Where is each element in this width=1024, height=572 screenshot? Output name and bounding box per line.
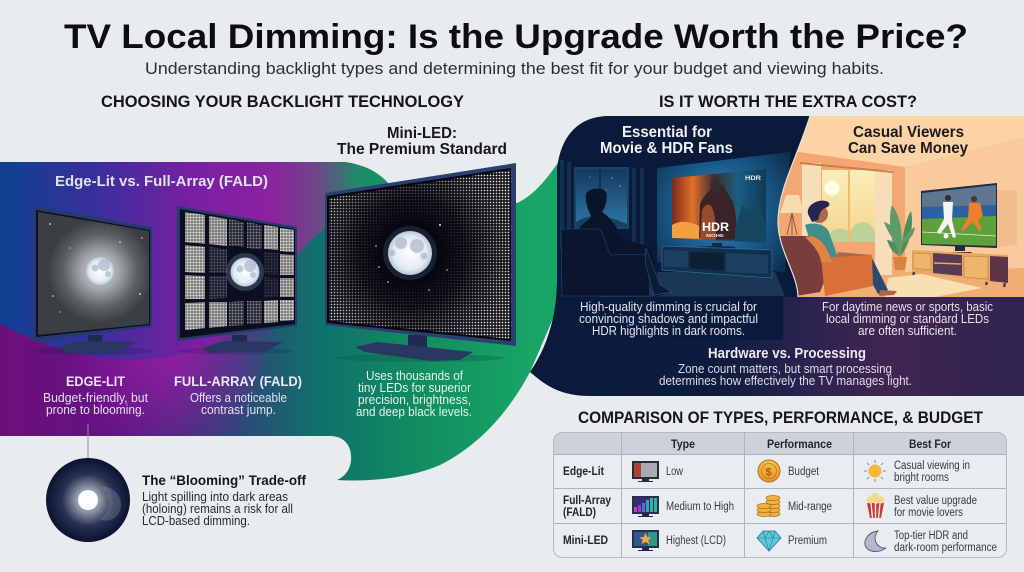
- floor lamp: [780, 195, 804, 235]
- text: high-quality dimming: convincing shadows and impactful: [579, 312, 758, 326]
- text: hardware vs processing: determines how effectively the TV manages light.: [659, 374, 912, 388]
- row: full-array: for movie lovers: [894, 507, 963, 519]
- heading: choosing your backlight technology: CHOOSING YOUR BACKLIGHT TECHNOLOGY: [101, 93, 464, 111]
- caption: mini-led: and deep black levels.: [356, 405, 472, 419]
- subtitle: Understanding backlight types and determining the best fit for your budget and viewing habits.: [145, 60, 884, 78]
- caption: edge-lit: [43, 374, 149, 417]
- text: casual viewers can save money: Can Save Money: [848, 140, 968, 157]
- icon: sun: [864, 460, 886, 482]
- heading: mini-led premium standard: The Premium Standard: [337, 141, 507, 158]
- scene: sunny living room: [770, 116, 1024, 297]
- row: full-array: Mid-range: [788, 501, 832, 513]
- text: hardware vs processing: Hardware vs. Processing: [708, 346, 866, 362]
- viewer in armchair: [775, 201, 897, 297]
- caption: mini-led: precision, brightness,: [358, 393, 471, 407]
- icon: coin stacks: [757, 496, 780, 516]
- heading: mini-led premium standard: Mini-LED:: [387, 125, 457, 142]
- icon: crescent moon: [865, 531, 886, 552]
- panel: is it worth the extra cost: [525, 116, 1024, 398]
- row: mini-led: [563, 530, 997, 554]
- text: blooming explanation: [142, 472, 306, 528]
- text: essential for movie and hdr fans: [600, 124, 733, 157]
- scene: dark home theater: [560, 152, 790, 297]
- comparison table: [554, 432, 1006, 558]
- text: essential for movie and hdr fans: Movie & HDR Fans: [600, 140, 733, 157]
- icon: full-array tv: [177, 206, 297, 354]
- text: high-quality dimming: HDR highlights in dark rooms.: [592, 324, 745, 338]
- text: hardware vs processing: Zone count matters, but smart processing: [678, 362, 892, 376]
- panel: backlight technology: [0, 158, 561, 480]
- table header: Type: [671, 439, 695, 451]
- row: full-array: (FALD): [563, 505, 596, 519]
- caption: mini-led: tiny LEDs for superior: [358, 381, 471, 395]
- text: blooming explanation: The “Blooming” Trade-off: [142, 472, 306, 488]
- caption: full-array: Offers a noticeable: [190, 391, 287, 405]
- table header: Performance: [767, 439, 832, 451]
- row: mini-led: Premium: [788, 535, 827, 547]
- tv with movie: HDR: [745, 176, 762, 182]
- row: edge-lit: Casual viewing in: [894, 460, 970, 472]
- caption: full-array: [174, 374, 302, 417]
- text: high-quality dimming: [579, 300, 758, 338]
- caption: mini-led: [356, 369, 472, 419]
- row: edge-lit: [563, 460, 970, 484]
- text: essential for movie and hdr fans: Essential for: [622, 124, 712, 141]
- icon: full-array monitor: [632, 496, 659, 517]
- caption: edge-lit: Budget-friendly, but: [43, 391, 149, 405]
- heading: mini-led premium standard: [337, 125, 507, 158]
- icon: dollar coin: $: [766, 466, 772, 478]
- text: daytime news or sports: For daytime news or sports, basic: [822, 300, 993, 314]
- text: hardware vs processing: [659, 346, 912, 388]
- text: casual viewers can save money: [848, 124, 968, 157]
- row: edge-lit: Budget: [788, 466, 820, 478]
- text: blooming explanation: Light spilling into dark areas: [142, 490, 288, 504]
- plant: [884, 205, 915, 270]
- row: mini-led: Highest (LCD): [666, 535, 726, 547]
- icon: mini-led tv: [325, 163, 516, 362]
- tv with movie: HDR: [702, 220, 729, 234]
- row: full-array: Medium to High: [666, 501, 734, 513]
- row: full-array: [563, 493, 977, 519]
- text: casual viewers can save money: Casual Viewers: [853, 124, 964, 141]
- text: daytime news or sports: [822, 300, 993, 338]
- icon: diamond: [757, 531, 781, 551]
- caption: full-array: FULL-ARRAY (FALD): [174, 374, 302, 389]
- row: edge-lit: Low: [666, 466, 684, 478]
- led zones: [185, 212, 294, 330]
- caption: mini-led: Uses thousands of: [366, 369, 463, 383]
- row: full-array: Best value upgrade: [894, 495, 977, 507]
- icon: dollar coin: [758, 460, 780, 482]
- caption: edge-lit: prone to blooming.: [46, 403, 145, 417]
- title: TV Local Dimming: Is the Upgrade Worth the Price?: [64, 18, 968, 56]
- viewer silhouette: [561, 189, 672, 297]
- icon: blooming orb: [46, 458, 130, 542]
- text: daytime news or sports: are often sufficient.: [858, 324, 957, 338]
- caption: full-array: contrast jump.: [201, 403, 276, 417]
- section label: edge-lit vs full-array: Edge-Lit vs. Full-Array (FALD): [55, 173, 268, 190]
- table header: [671, 439, 951, 451]
- media cabinet: [662, 246, 772, 278]
- text: daytime news or sports: local dimming or standard LEDs: [826, 312, 989, 326]
- heading: is it worth the extra cost: IS IT WORTH THE EXTRA COST?: [659, 93, 917, 111]
- caption: edge-lit: EDGE-LIT: [66, 374, 126, 389]
- tv with movie: [672, 169, 766, 249]
- text: high-quality dimming: High-quality dimming is crucial for: [580, 300, 757, 314]
- icon: edge-lit monitor: [632, 461, 659, 482]
- tv with movie: MOHE: [706, 233, 724, 238]
- icon: popcorn: [866, 493, 884, 518]
- row: edge-lit: Edge-Lit: [563, 464, 604, 478]
- row: mini-led: dark-room performance: [894, 542, 997, 554]
- heading: comparison table: COMPARISON OF TYPES, PERFORMANCE, & BUDGET: [578, 409, 983, 427]
- football tv: [921, 183, 997, 253]
- tv cabinet: [912, 250, 1008, 287]
- text: blooming explanation: (holoing) remains a risk for all: [142, 502, 293, 516]
- table header: Best For: [909, 439, 951, 451]
- row: edge-lit: bright rooms: [894, 472, 949, 484]
- icon: edge-lit tv: [30, 206, 154, 355]
- icon: mini-led monitor: [632, 530, 659, 551]
- row: mini-led: Top-tier HDR and: [894, 530, 968, 542]
- row: full-array: Full-Array: [563, 493, 611, 507]
- callout: blooming trade-off: [46, 424, 306, 542]
- row: mini-led: Mini-LED: [563, 533, 608, 547]
- text: blooming explanation: LCD-based dimming.: [142, 514, 250, 528]
